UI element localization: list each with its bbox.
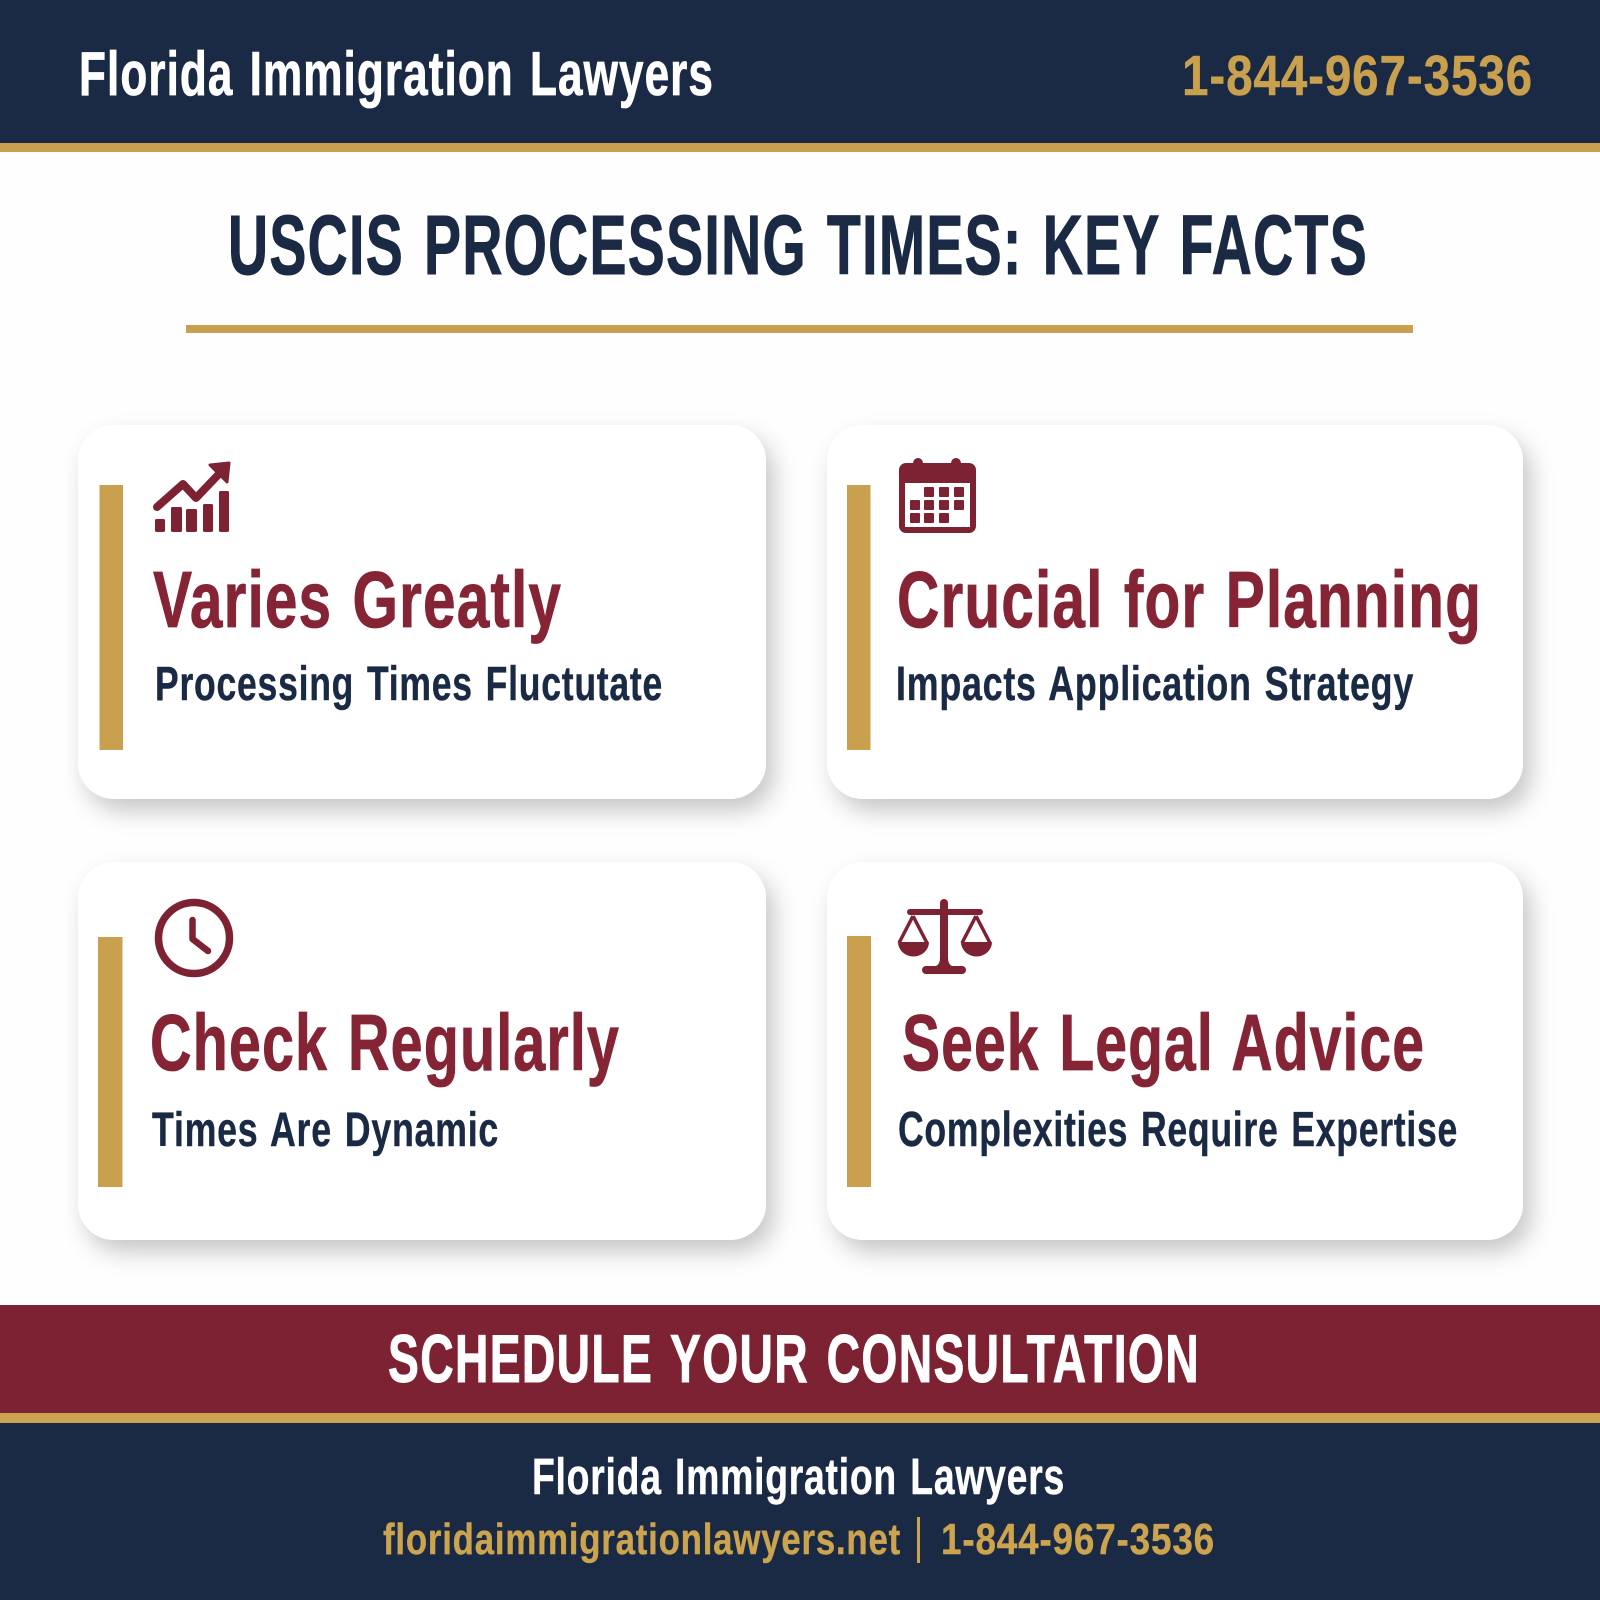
- heading: Varies Greatly: [153, 555, 562, 644]
- footer contact details: floridaimmigrationlawyers.net: [383, 1515, 901, 1564]
- icon: rising chart: [155, 463, 229, 532]
- header phone number: 1-844-967-3536: [1182, 44, 1533, 108]
- call to action text: SCHEDULE YOUR CONSULTATION: [388, 1321, 1200, 1397]
- subheading: Times Are Dynamic: [152, 1104, 499, 1157]
- icon: calendar: [899, 458, 976, 533]
- icon: scales of justice: [898, 899, 992, 974]
- footer contact details: 1-844-967-3536: [941, 1515, 1215, 1564]
- panel: varies greatly: [78, 425, 766, 799]
- subheading: Impacts Application Strategy: [896, 658, 1414, 711]
- header firm name: Florida Immigration Lawyers: [79, 40, 714, 109]
- heading: Check Regularly: [150, 998, 620, 1087]
- title rule: [186, 325, 1413, 333]
- footer firm name: Florida Immigration Lawyers: [532, 1448, 1065, 1505]
- panel: check regularly: [78, 862, 766, 1240]
- footer: [0, 1413, 1600, 1600]
- subheading: Processing Times Fluctutate: [155, 658, 663, 711]
- panel: crucial for planning: [827, 425, 1523, 799]
- header bar: [0, 0, 1600, 152]
- call to action band: [0, 1305, 1600, 1413]
- panel: seek legal advice: [827, 862, 1523, 1240]
- icon: clock: [158, 902, 230, 974]
